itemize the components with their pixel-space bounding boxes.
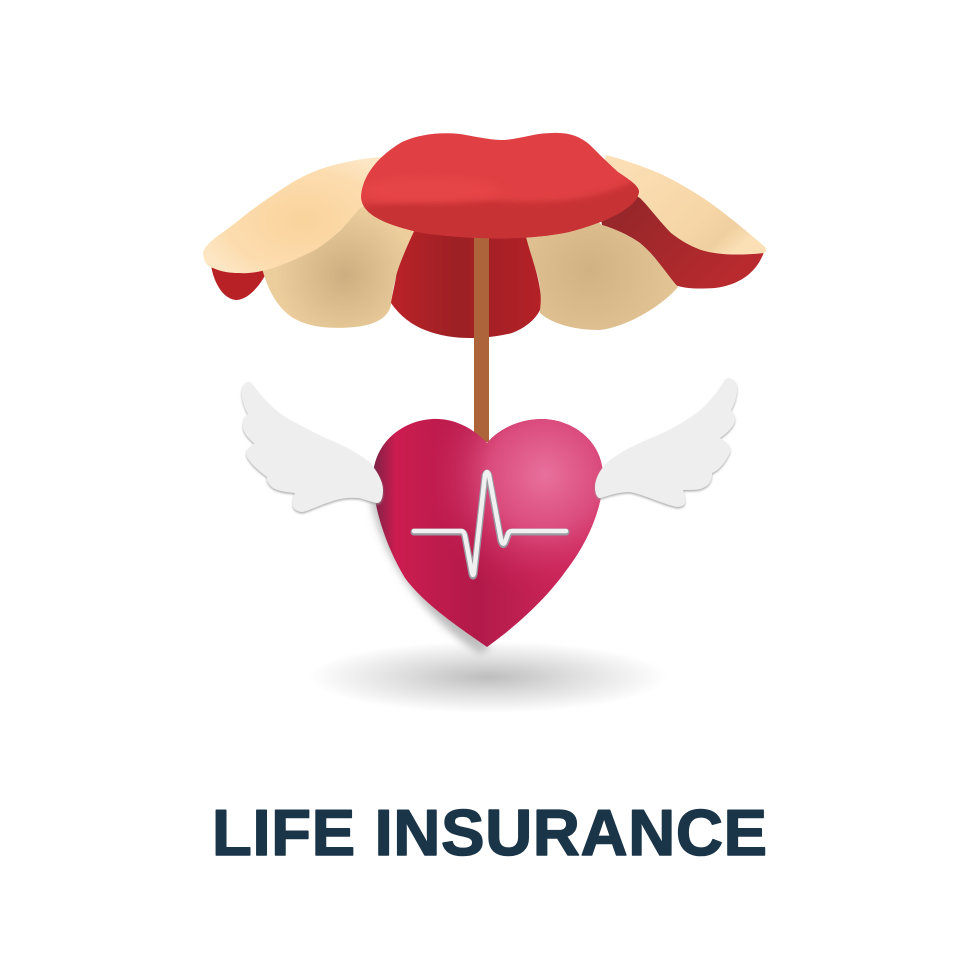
right wing: [595, 378, 737, 507]
umbrella: [203, 128, 766, 442]
pulse line: [414, 472, 566, 576]
left cream petal: [203, 157, 385, 273]
left wing: [242, 382, 383, 512]
heart: [372, 419, 603, 654]
left tan petal: [262, 205, 420, 328]
left back red flap: [211, 265, 270, 300]
right cream petal: [600, 155, 766, 255]
centre red petal: [391, 225, 541, 338]
top canopy: [361, 132, 639, 238]
umbrella pole: [474, 236, 489, 442]
heart shadow: [372, 470, 490, 654]
ground shadow: [308, 641, 668, 713]
infographic: life insurance icon: [203, 132, 766, 856]
heart highlight: [373, 419, 603, 647]
title: LIFE INSURANCE: [212, 796, 767, 869]
right red underside: [600, 195, 764, 289]
heart body: [373, 419, 603, 647]
right tan petal: [523, 215, 678, 330]
